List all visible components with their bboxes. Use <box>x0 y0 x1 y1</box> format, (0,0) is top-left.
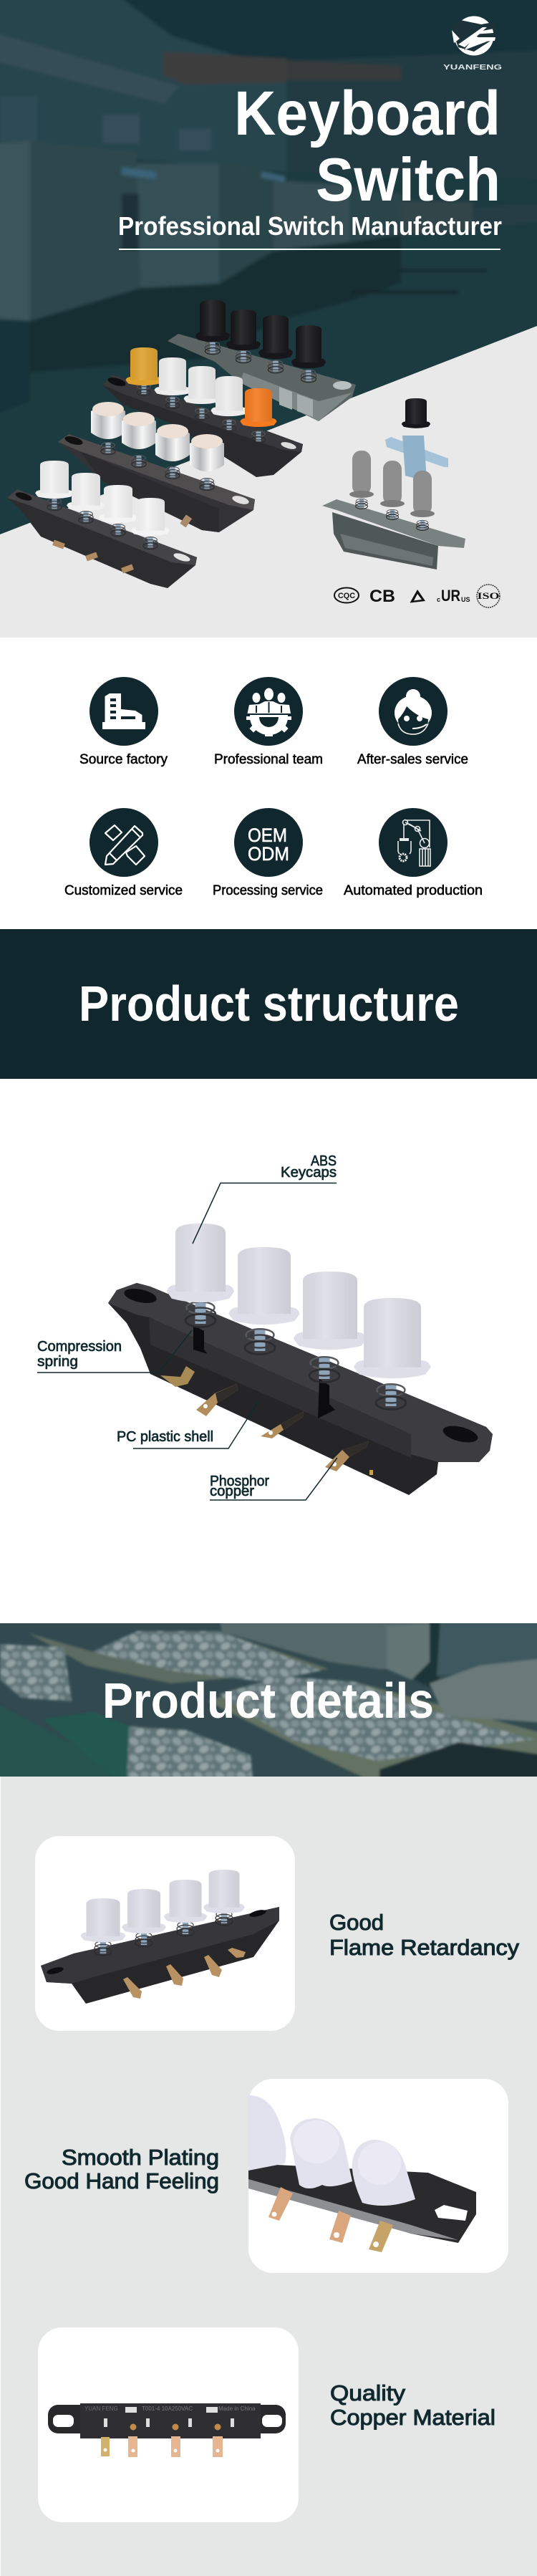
icon: factory <box>90 677 158 746</box>
icon: support agent <box>379 677 448 746</box>
icon: team and gear <box>234 677 303 746</box>
banner: product details <box>0 1619 537 1784</box>
switch back view: T001-4 10A250VAC <box>142 2406 193 2412</box>
card: copper material image <box>38 2327 299 2522</box>
icon: OEM ODM: ODM <box>248 843 289 865</box>
panel: details list <box>0 1777 537 2576</box>
icon: robot arm <box>379 808 448 877</box>
item: customized service: Customized service <box>64 883 183 898</box>
terminals <box>101 2436 223 2457</box>
panel: hero <box>0 0 537 638</box>
callout: PC plastic shell: PC plastic shell <box>117 1429 213 1445</box>
item: source factory <box>79 677 168 767</box>
banner: product structure <box>0 929 537 1079</box>
keycaps <box>248 2095 415 2206</box>
logo wordmark: YUANFENG <box>443 63 502 72</box>
terminals <box>123 1948 246 1999</box>
switch base <box>248 2163 476 2243</box>
item: after-sales service: After-sales service <box>357 752 468 767</box>
card: smooth plating image <box>248 2079 508 2273</box>
text: smooth plating <box>24 2145 219 2193</box>
callout: compression spring: Compression <box>37 1339 122 1355</box>
product: black base switch with chrome keycaps <box>58 402 255 532</box>
callout: ABS keycaps: ABS <box>311 1153 337 1169</box>
UL mark: c <box>437 596 440 603</box>
item: after-sales service <box>357 677 468 767</box>
callout: phosphor copper: copper <box>210 1484 254 1499</box>
logo mark <box>452 16 498 56</box>
switch back view <box>48 2403 286 2438</box>
text: good flame retardancy <box>329 1910 520 1960</box>
item: processing service: Processing service <box>213 883 323 898</box>
CQC mark <box>334 587 359 603</box>
CB mark: CB <box>369 587 395 606</box>
factory photo background <box>0 0 537 544</box>
ISO mark: ISO <box>477 590 500 601</box>
callout: compression spring: spring <box>37 1354 78 1370</box>
callout: phosphor copper: Phosphor <box>210 1474 269 1489</box>
callout: ABS keycaps <box>193 1153 337 1244</box>
blue slider <box>385 436 448 481</box>
exploded base <box>322 499 465 569</box>
panel: structure diagram <box>0 1079 537 1623</box>
panel: service icons <box>0 638 537 929</box>
text: smooth plating: Good Hand Feeling <box>24 2168 219 2193</box>
icon: pencil and ruler <box>90 808 158 877</box>
card: flame retardancy image <box>35 1836 295 2031</box>
UL mark <box>437 587 470 605</box>
ISO mark <box>477 585 500 607</box>
chrome keycaps <box>91 402 224 471</box>
springs <box>95 1911 233 1956</box>
icon: OEM ODM <box>234 808 303 877</box>
text: quality copper material <box>330 2380 495 2430</box>
heading: Product details <box>102 1673 434 1729</box>
title: Switch <box>316 146 500 214</box>
ABS keycaps <box>167 1224 431 1378</box>
switch back view: Made in China <box>218 2406 256 2412</box>
title: Keyboard <box>234 79 500 148</box>
subtitle: Professional Switch Manufacturer <box>118 211 502 241</box>
logo: Yuanfeng <box>443 16 502 72</box>
copper terminals <box>160 1366 369 1471</box>
callout: ABS keycaps: Keycaps <box>281 1165 337 1181</box>
item: customized service <box>64 808 183 898</box>
product: exploded switch <box>322 398 465 569</box>
switch base <box>41 1907 279 2004</box>
CQC mark: CQC <box>338 592 355 600</box>
item: automated production: Automated production <box>344 883 483 898</box>
product: black base switch with yellow, white and orange keycaps <box>102 347 303 477</box>
UL mark: US <box>461 596 470 603</box>
heading: Product structure <box>79 976 459 1032</box>
product: clear base switch with black keycaps <box>168 300 356 421</box>
UL mark: UR <box>441 587 460 605</box>
callout: phosphor copper <box>210 1458 337 1500</box>
item: automated production <box>344 808 483 898</box>
text: good flame retardancy: Flame Retardancy <box>329 1935 520 1960</box>
product photo: switch <box>108 1224 493 1495</box>
black keycap <box>402 398 430 428</box>
icon: OEM ODM: OEM <box>248 825 287 846</box>
item: source factory: Source factory <box>79 752 168 767</box>
text: quality copper material: Copper Material <box>330 2405 495 2430</box>
item: processing service <box>213 808 323 898</box>
text: smooth plating: Smooth Plating <box>62 2145 219 2170</box>
title <box>234 79 500 214</box>
switch body <box>108 1283 493 1495</box>
product: black base switch with white keycaps <box>7 461 197 588</box>
switch back view: YUAN FENG <box>84 2406 118 2412</box>
callout: compression spring <box>37 1330 192 1373</box>
text: good flame retardancy: Good <box>329 1910 384 1935</box>
keycaps <box>81 1870 245 1942</box>
certification logos <box>334 585 500 607</box>
callout: PC plastic shell <box>117 1401 258 1448</box>
compression springs <box>185 1302 406 1410</box>
subtitle underline <box>119 249 500 250</box>
text: quality copper material: Quality <box>330 2380 406 2406</box>
terminals <box>268 2187 393 2252</box>
assembly photo background <box>0 1619 537 1784</box>
item: professional team: Professional team <box>214 752 323 767</box>
grey pins <box>349 451 435 517</box>
triangle mark <box>410 590 425 603</box>
item: professional team <box>214 677 323 767</box>
